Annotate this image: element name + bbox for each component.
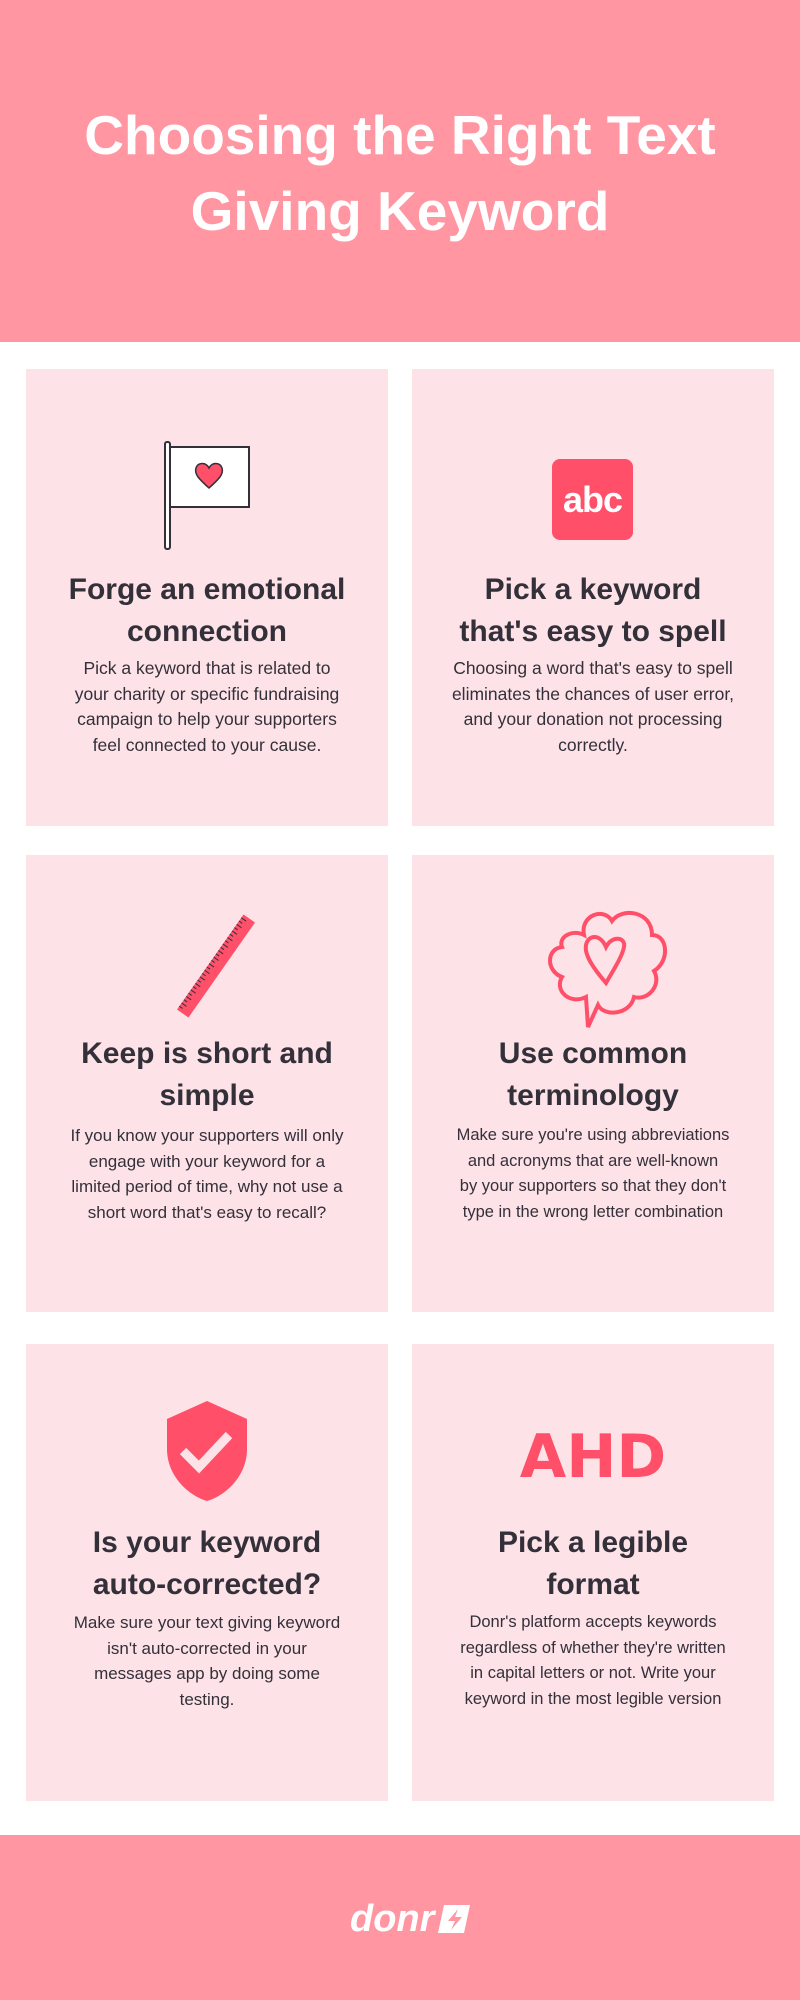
heading <box>498 1526 688 1601</box>
body text: limited period of time, why not use a <box>71 1177 343 1196</box>
body text: type in the wrong letter combination <box>463 1202 723 1220</box>
heading <box>93 1526 321 1601</box>
body text: feel connected to your cause. <box>93 734 321 754</box>
body text: isn't auto-corrected in your <box>107 1638 307 1658</box>
body text: Make sure your text giving keyword <box>74 1613 340 1632</box>
heading <box>459 573 727 648</box>
body text: and acronyms that are well-known <box>468 1152 718 1170</box>
heading <box>499 1037 687 1112</box>
panel: legible format <box>412 1344 774 1801</box>
heading: Pick a legible <box>498 1526 688 1559</box>
body text <box>74 1613 340 1708</box>
panel: common terminology <box>412 855 774 1312</box>
icon: flag with heart <box>164 441 250 550</box>
icon: AHD: AHD <box>520 1422 666 1492</box>
footer <box>0 1835 800 2000</box>
body text: short word that's easy to recall? <box>88 1202 326 1222</box>
heading: Keep is short and <box>81 1037 333 1070</box>
body text: campaign to help your supporters <box>77 709 337 729</box>
body text <box>74 658 339 754</box>
panel: short and simple <box>26 855 388 1312</box>
heading: Pick a keyword <box>485 573 701 606</box>
body text: messages app by doing some <box>94 1664 320 1683</box>
header <box>0 0 800 342</box>
body text: correctly. <box>558 734 628 754</box>
heading: Use common <box>499 1037 687 1070</box>
panel: auto-corrected <box>26 1344 388 1801</box>
icon: ruler <box>177 914 255 1018</box>
title <box>84 104 716 242</box>
heading: auto-corrected? <box>93 1568 321 1601</box>
body text: your charity or specific fundraising <box>75 684 339 704</box>
body text: testing. <box>180 1690 234 1708</box>
heading: that's easy to spell <box>459 615 727 648</box>
icon: cloud with heart <box>548 910 668 1028</box>
heading: Is your keyword <box>93 1526 321 1559</box>
body text <box>457 1126 729 1220</box>
icon: abc: abc <box>563 479 622 520</box>
icon: shield with check <box>167 1401 247 1501</box>
heading: format <box>546 1568 640 1601</box>
body text <box>460 1613 726 1708</box>
body text <box>452 658 734 754</box>
panel: easy to spell <box>412 369 774 826</box>
body text: regardless of whether they're written <box>460 1638 726 1656</box>
heading: Forge an emotional <box>69 573 345 606</box>
panel: emotional connection <box>26 369 388 826</box>
heading: terminology <box>507 1079 679 1112</box>
body text: and your donation not processing <box>464 709 722 729</box>
heading <box>69 573 345 648</box>
body text: by your supporters so that they don't <box>460 1177 726 1195</box>
icon: abc <box>552 459 633 540</box>
body text: eliminates the chances of user error, <box>452 684 734 704</box>
logo: donr: donr <box>350 1898 434 1940</box>
body text: Choosing a word that's easy to spell <box>453 658 733 678</box>
body text: Pick a keyword that is related to <box>83 658 331 678</box>
heading: connection <box>127 615 287 648</box>
body text: keyword in the most legible version <box>465 1690 721 1708</box>
title: Giving Keyword <box>191 180 609 242</box>
heading: simple <box>159 1079 255 1112</box>
body text: Make sure you're using abbreviations <box>457 1126 729 1144</box>
title: Choosing the Right Text <box>84 104 716 166</box>
body text <box>70 1126 344 1222</box>
heading <box>81 1037 333 1112</box>
body text: Donr's platform accepts keywords <box>469 1613 717 1631</box>
body text: in capital letters or not. Write your <box>470 1664 716 1682</box>
body text: engage with your keyword for a <box>89 1152 325 1170</box>
body text: If you know your supporters will only <box>70 1126 344 1145</box>
